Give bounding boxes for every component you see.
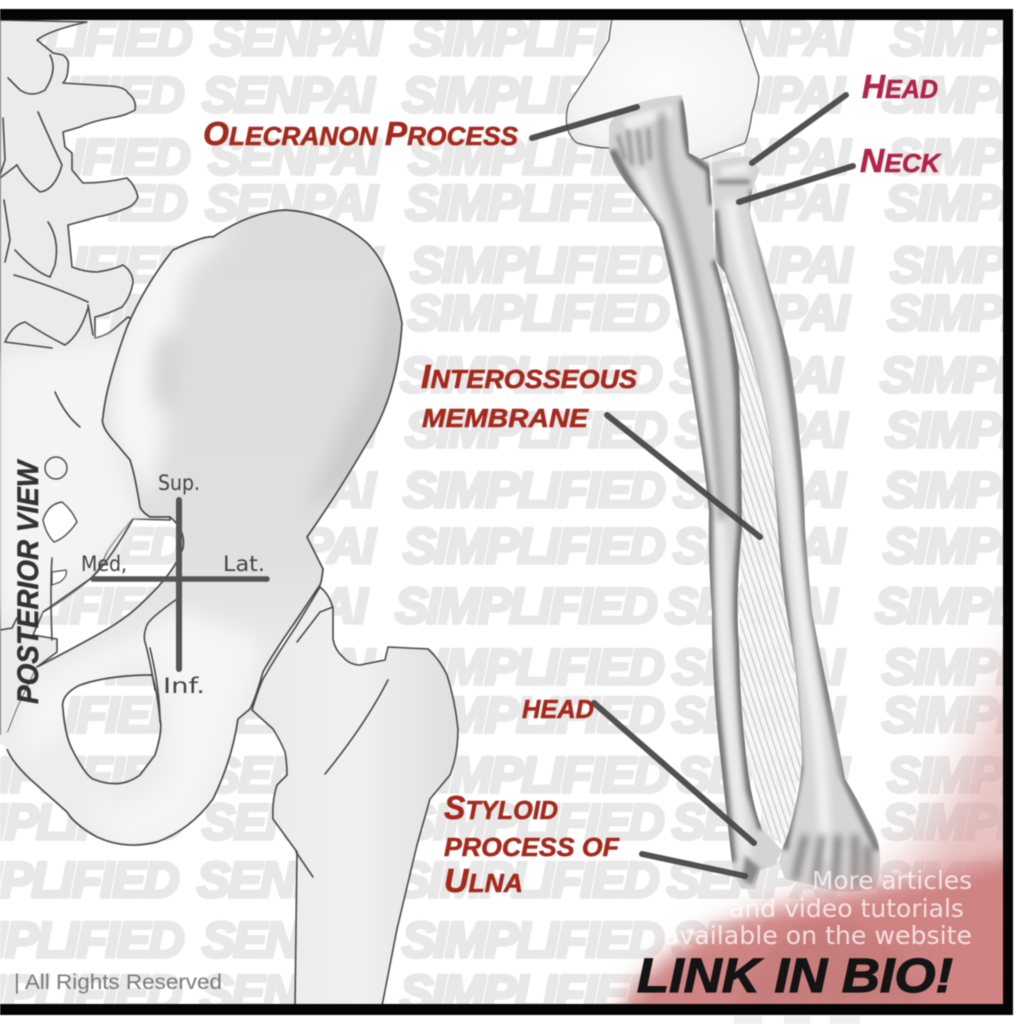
call to action text: available on the website bbox=[664, 921, 972, 950]
call to action text bbox=[664, 866, 972, 950]
label: Interosseous membrane: MEMBRANE bbox=[422, 403, 589, 433]
illustration: distal humerus bbox=[566, 18, 759, 160]
watermark: repeated brand text: SENPAI bbox=[680, 237, 854, 293]
watermark: repeated brand text: SENPAI bbox=[673, 462, 847, 518]
watermark: repeated brand text: SENPAI bbox=[200, 347, 374, 403]
watermark: repeated brand text: SIMPLIFIED bbox=[400, 347, 661, 403]
watermark: repeated brand text: SENPAI bbox=[202, 67, 376, 123]
label: Head (radius): HEAD bbox=[862, 68, 938, 105]
watermark: repeated brand text: SENPAI bbox=[200, 965, 374, 1021]
watermark: repeated brand text: SIMPLIFIED bbox=[408, 129, 669, 185]
callout background: red gradient panel bbox=[609, 636, 1004, 1005]
watermark: repeated brand text: SENPAI bbox=[202, 639, 376, 695]
watermark: repeated brand text: SENPAI bbox=[203, 518, 377, 574]
watermark: repeated brand text: SENPAI bbox=[672, 639, 846, 695]
label: Styloid process of Ulna: ULNA bbox=[444, 862, 523, 899]
orientation cross: Med, bbox=[81, 552, 127, 576]
illustration: spine and sacrum bbox=[0, 20, 170, 742]
watermark: repeated brand text: SENPAI bbox=[205, 175, 379, 231]
call to action: Link in bio: LINK IN BIO! bbox=[637, 950, 953, 1003]
label: Styloid process of Ulna: STYLOID bbox=[444, 789, 558, 826]
watermark: repeated brand text: SIMPLIFIED bbox=[403, 518, 664, 574]
label: Styloid process of Ulna bbox=[444, 789, 620, 899]
watermark: repeated brand text: SIMPLIFIED bbox=[403, 462, 664, 518]
watermark: repeated brand text: SENPAI bbox=[675, 175, 849, 231]
watermark: repeated brand text: SENPAI bbox=[677, 747, 851, 803]
watermark: repeated brand text: SENPAI bbox=[680, 10, 854, 66]
illustration: interosseous membrane bbox=[725, 275, 802, 848]
label: Neck: NECK bbox=[860, 142, 942, 179]
watermark: repeated brand text: SENPAI bbox=[678, 129, 852, 185]
watermark: repeated brand text: SENPAI bbox=[202, 687, 376, 743]
watermark: repeated brand text: SENPAI bbox=[677, 285, 851, 341]
watermark: repeated brand text: SIMPLIFIED bbox=[407, 285, 668, 341]
watermark: repeated brand text: SIMPLIFIED bbox=[402, 912, 663, 968]
watermark: repeated brand text: SIMPLIFIED bbox=[402, 639, 663, 695]
watermark: repeated brand text: SENPAI bbox=[205, 402, 379, 458]
watermark: repeated brand text: SIMPLIFIED bbox=[402, 687, 663, 743]
orientation cross: Lat. bbox=[223, 552, 265, 576]
watermark: repeated brand text: SENPAI bbox=[670, 965, 844, 1021]
watermark: repeated brand text: SENPAI bbox=[673, 518, 847, 574]
illustration: radius bbox=[712, 157, 880, 892]
watermark: repeated brand text: SENPAI bbox=[197, 852, 371, 908]
watermark: repeated brand text: SENPAI bbox=[195, 578, 369, 634]
orientation cross bbox=[81, 471, 267, 698]
watermark: repeated brand text: SENPAI bbox=[203, 462, 377, 518]
watermark: repeated brand text: SENPAI bbox=[675, 402, 849, 458]
watermark: repeated brand text: SIMPLIFIED bbox=[410, 237, 671, 293]
watermark: repeated brand text: SENPAI bbox=[208, 129, 382, 185]
callout lines bbox=[532, 95, 853, 876]
watermark: repeated brand text: SENPAI bbox=[670, 347, 844, 403]
watermark: repeated brand text: SENPAI bbox=[202, 912, 376, 968]
watermark: repeated brand text: SENPAI bbox=[667, 852, 841, 908]
watermark: repeated brand text: SENPAI bbox=[672, 912, 846, 968]
label: head (ulna): HEAD bbox=[522, 694, 594, 724]
illustration: ulna bbox=[609, 95, 782, 889]
watermark: repeated brand text: SENPAI bbox=[672, 687, 846, 743]
call to action text: and video tutorials bbox=[729, 894, 964, 923]
label: Posterior view: POSTERIOR VIEW bbox=[12, 459, 45, 704]
watermark: repeated brand text: SIMPLIFIED bbox=[395, 578, 656, 634]
watermark: repeated brand text: SENPAI bbox=[207, 285, 381, 341]
watermark: repeated brand text: SIMPLIFIED bbox=[402, 794, 663, 850]
label: Interosseous membrane: INTEROSSEOUS bbox=[421, 358, 638, 395]
watermark: repeated brand text: SIMPLIFIED bbox=[402, 67, 663, 123]
watermark: repeated brand text: SIMPLIFIED bbox=[397, 852, 658, 908]
watermark: repeated brand text: SIMPLIFIED bbox=[410, 10, 671, 66]
watermark: repeated brand text: SENPAI bbox=[665, 578, 839, 634]
icon: sacral foramina bbox=[43, 457, 77, 585]
call to action text: More articles bbox=[812, 866, 972, 895]
label: Styloid process of Ulna: PROCESS OF bbox=[444, 832, 620, 862]
watermark: repeated brand text: SENPAI bbox=[672, 67, 846, 123]
orientation cross: Sup. bbox=[158, 471, 200, 495]
watermark: repeated brand text: SIMPLIFIED bbox=[407, 747, 668, 803]
copyright line: | All Rights Reserved bbox=[14, 971, 222, 994]
faint bone marks outside the frame bbox=[734, 1016, 860, 1024]
watermark: repeated brand text: SENPAI bbox=[202, 794, 376, 850]
label: Olecranon Process: OLECRANON PROCESS bbox=[203, 115, 519, 152]
watermark: repeated brand text: SIMPLIFIED bbox=[405, 175, 666, 231]
watermark: repeated brand text: SENPAI bbox=[672, 794, 846, 850]
watermark: repeated brand text: SIMPLIFIED bbox=[405, 402, 666, 458]
label: Interosseous membrane bbox=[421, 358, 638, 433]
watermark: repeated brand text: SIMPLIFIED bbox=[400, 965, 661, 1021]
illustration: femur bbox=[252, 587, 458, 1006]
illustration: hip bone with obturator foramen bbox=[0, 210, 410, 850]
watermark: repeated brand text: SENPAI bbox=[210, 237, 384, 293]
orientation cross: Inf. bbox=[163, 674, 205, 698]
watermark: repeated brand text: SENPAI bbox=[210, 10, 384, 66]
watermark: repeated brand text: SENPAI bbox=[207, 747, 381, 803]
